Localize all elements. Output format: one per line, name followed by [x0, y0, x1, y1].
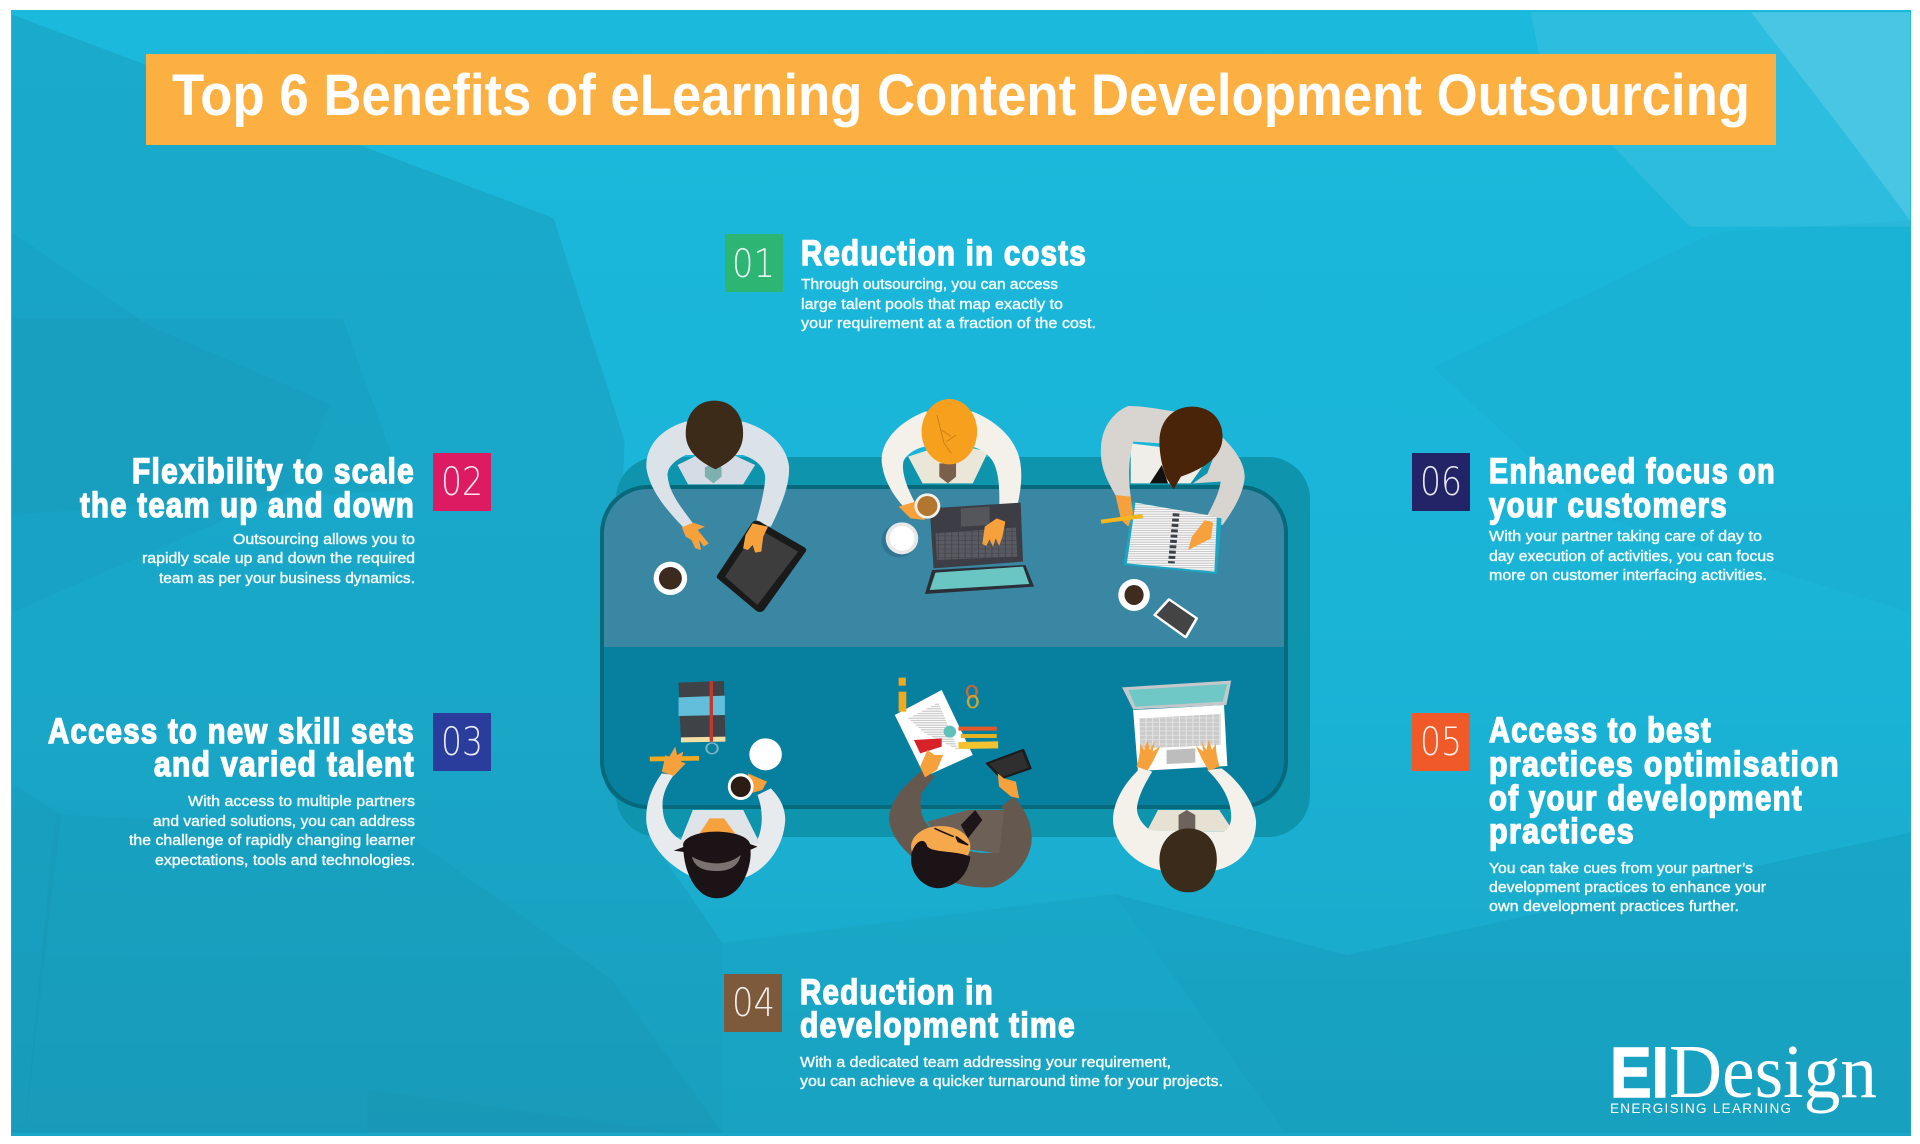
title banner	[146, 54, 1776, 145]
benefit 02: flexibility to scale: Flexibility to scale	[132, 452, 415, 491]
benefit 06: enhanced focus on customers: 06	[1420, 460, 1462, 505]
benefit 01: reduction in costs: 01	[732, 242, 775, 287]
benefit 02: flexibility to scale	[80, 452, 491, 587]
benefit 01: reduction in costs	[725, 234, 1096, 332]
bottom row of people: coordinates in zoom space	[646, 678, 1256, 898]
benefit 03: access to new skill sets: Access to new skill sets	[48, 712, 415, 751]
benefit 05: access to best practices: Access to best	[1489, 711, 1712, 750]
benefit 04: reduction in development time: you can achieve a quicker turnaround time for your projects.	[800, 1074, 1223, 1090]
benefit 03: access to new skill sets: expectations, tools and technologies.	[155, 853, 415, 869]
person 6 with white laptop	[1113, 681, 1256, 892]
benefit 04: reduction in development time: With a dedicated team addressing your requirement,	[800, 1055, 1171, 1071]
benefit 06: enhanced focus on customers: more on customer interfacing activities.	[1489, 568, 1767, 584]
benefit 02: flexibility to scale: the team up and down	[80, 486, 415, 525]
benefit 06: enhanced focus on customers: day execution of activities, you can focus	[1489, 549, 1774, 565]
person 1 with tablet and coffee	[646, 401, 801, 609]
benefit 03: access to new skill sets: and varied solutions, you can address	[153, 814, 415, 830]
benefit 04: reduction in development time: 04	[732, 981, 775, 1026]
benefit 06: enhanced focus on customers: With your partner taking care of day to	[1489, 529, 1762, 545]
benefit 04: reduction in development time: development time	[800, 1006, 1076, 1045]
benefit 05: access to best practices: 05	[1420, 720, 1462, 765]
benefit 01: reduction in costs: large talent pools that map exactly to	[801, 297, 1063, 313]
benefit 01: reduction in costs: Through outsourcing, you can access	[801, 277, 1058, 293]
benefit 03: access to new skill sets: 03	[441, 720, 483, 765]
person 2 with laptop, cup and plate	[881, 399, 1034, 594]
benefit 02: flexibility to scale: rapidly scale up and down the required	[142, 551, 415, 567]
person 3 with notebook, pen, cup and phone	[1101, 406, 1245, 637]
benefit 02: flexibility to scale: team as per your business dynamics.	[159, 571, 415, 587]
logo: EIDesign: Design	[1669, 1030, 1877, 1114]
benefit 03: access to new skill sets: With access to multiple partners	[188, 794, 415, 810]
benefit 05: access to best practices: development practices to enhance your	[1489, 880, 1766, 896]
benefit 03: access to new skill sets: and varied talent	[154, 745, 415, 784]
benefit 06: enhanced focus on customers: Enhanced focus on	[1489, 452, 1776, 491]
benefit 05: access to best practices: own development practices further.	[1489, 899, 1739, 915]
person 5 with report, pens and tablet	[889, 678, 1032, 888]
benefit 02: flexibility to scale: 02	[441, 460, 483, 505]
benefit 05: access to best practices: of your development	[1489, 779, 1803, 818]
person 4 with notebook, pen, plate and cup	[646, 681, 785, 898]
benefit 05: access to best practices: practices optimisation	[1489, 745, 1840, 784]
meeting table	[602, 457, 1310, 837]
benefit 06: enhanced focus on customers	[1412, 452, 1776, 584]
benefit 01: reduction in costs: Reduction in costs	[801, 234, 1087, 273]
benefit 03: access to new skill sets	[48, 712, 491, 869]
benefit 06: enhanced focus on customers: your customers	[1489, 486, 1728, 525]
logo: EIDesign: ENERGISING LEARNING	[1610, 1101, 1791, 1116]
top row of people: coordinates in zoom space	[646, 399, 1245, 637]
benefit 04: reduction in development time: Reduction in	[800, 973, 994, 1012]
benefit 02: flexibility to scale: Outsourcing allows you to	[233, 532, 415, 548]
logo: EIDesign: EI	[1610, 1034, 1669, 1113]
title banner: Top 6 Benefits of eLearning Content Development Outsourcing	[172, 63, 1750, 128]
benefit 03: access to new skill sets: the challenge of rapidly changing learner	[129, 833, 415, 849]
benefit 05: access to best practices: You can take cues from your partner’s	[1489, 861, 1753, 877]
benefit 05: access to best practices	[1412, 711, 1840, 915]
benefit 01: reduction in costs: your requirement at a fraction of the cost.	[801, 316, 1096, 332]
benefit 05: access to best practices: practices	[1489, 812, 1635, 851]
benefit 04: reduction in development time	[724, 973, 1223, 1090]
